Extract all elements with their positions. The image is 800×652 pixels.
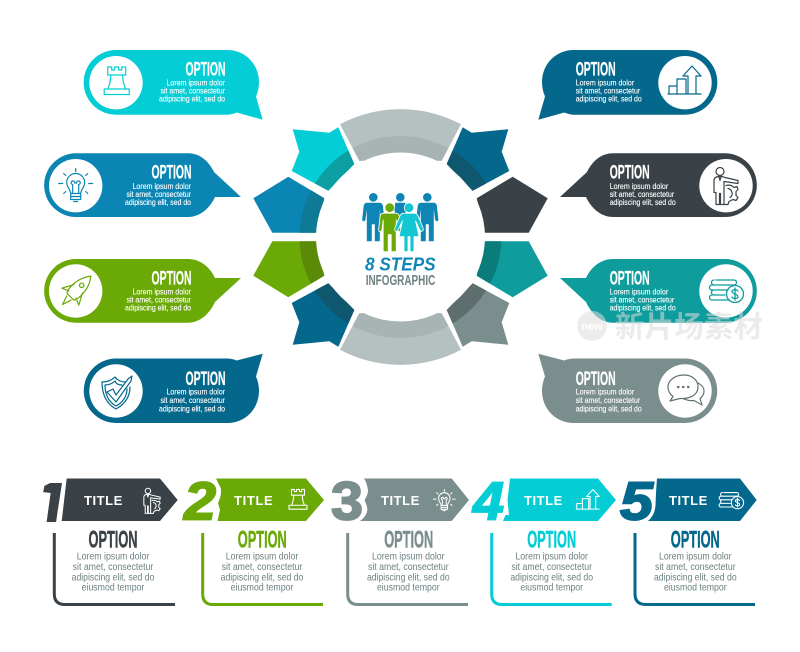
callout: bottom right grey: sit amet, consectetur bbox=[576, 395, 640, 405]
watermark: new bbox=[581, 321, 603, 333]
icon: rook bbox=[104, 67, 129, 94]
step 4: eiusmod tempor bbox=[520, 582, 583, 594]
callout: top left light teal: Lorem ipsum dolor bbox=[166, 78, 225, 88]
callout: charcoal right bbox=[560, 153, 757, 217]
ring segment: teal arrow bbox=[477, 241, 548, 297]
callout: teal right: OPTION bbox=[610, 268, 650, 289]
icon: growth chart small bbox=[576, 490, 599, 509]
arrow banner 3 bbox=[360, 478, 469, 521]
step 2: OPTION bbox=[238, 527, 287, 554]
ring segment: grey arrow lower right bbox=[447, 283, 509, 347]
icon: businessman with gear bbox=[714, 168, 738, 204]
step 5: sit amet, consectetur bbox=[655, 561, 736, 573]
icon: businessman small bbox=[144, 488, 160, 513]
callout: blue left: sit amet, consectetur bbox=[126, 189, 191, 199]
callout: bottom left dark blue: Lorem ipsum dolor bbox=[166, 387, 225, 397]
callout: charcoal right: sit amet, consectetur bbox=[610, 189, 674, 199]
number 2: 2 bbox=[183, 472, 216, 532]
callout: charcoal right: Lorem ipsum dolor bbox=[610, 181, 668, 191]
callout: top right dark blue: sit amet, consectetur bbox=[576, 86, 640, 96]
callout: bottom right grey: adipiscing elit, sed do bbox=[576, 404, 642, 414]
step 2: eiusmod tempor bbox=[231, 582, 294, 594]
icon: light bulb small bbox=[433, 489, 455, 511]
step 3: sit amet, consectetur bbox=[368, 561, 449, 573]
step 5: TITLE bbox=[669, 493, 708, 508]
step 3: adipiscing elit, sed do bbox=[367, 571, 450, 583]
icon: rook small bbox=[289, 489, 307, 509]
step 4 bbox=[472, 472, 616, 604]
icon: group of people bbox=[362, 193, 438, 252]
icon: growth chart bbox=[668, 66, 701, 94]
step 1 bbox=[33, 474, 178, 604]
heading: infographic: INFOGRAPHIC bbox=[366, 272, 435, 289]
ring segment: dark blue arrow lower left bbox=[292, 283, 354, 347]
callout: charcoal right: adipiscing elit, sed do bbox=[610, 197, 676, 207]
watermark: 新片场素材 bbox=[615, 311, 763, 344]
step 3 bbox=[331, 472, 469, 604]
step 3: Lorem ipsum dolor bbox=[372, 550, 445, 562]
number 3: 3 bbox=[331, 472, 363, 532]
callout: teal right: adipiscing elit, sed do bbox=[610, 302, 676, 312]
callout: blue left: Lorem ipsum dolor bbox=[132, 181, 191, 191]
icon: rocket bbox=[54, 268, 99, 313]
step 4: adipiscing elit, sed do bbox=[510, 571, 593, 583]
step 1: sit amet, consectetur bbox=[73, 561, 154, 573]
callout: top left light teal: sit amet, consectetur bbox=[160, 86, 225, 96]
callout: blue left bbox=[44, 153, 241, 217]
step 1: Lorem ipsum dolor bbox=[77, 550, 150, 562]
step 3: OPTION bbox=[384, 527, 433, 554]
arrow banner 2 bbox=[216, 478, 324, 521]
number 4: 4 bbox=[472, 472, 504, 532]
step 5: adipiscing elit, sed do bbox=[654, 571, 737, 583]
callout: top right dark blue: OPTION bbox=[576, 60, 616, 81]
icon: speech bubbles bbox=[668, 375, 704, 405]
icon: light bulb bbox=[59, 168, 93, 202]
callout: bottom left dark blue: sit amet, consectetur bbox=[160, 395, 225, 405]
step 1: eiusmod tempor bbox=[82, 582, 145, 594]
arrow banner 5 bbox=[648, 478, 757, 521]
icon: shield with check bbox=[102, 376, 132, 409]
callout: bottom right grey: OPTION bbox=[576, 369, 616, 390]
step 1: TITLE bbox=[84, 493, 123, 508]
step 2: adipiscing elit, sed do bbox=[221, 571, 303, 583]
callout: green left: adipiscing elit, sed do bbox=[125, 302, 191, 312]
number 1: 1 bbox=[33, 474, 67, 534]
step 5: OPTION bbox=[671, 527, 720, 554]
callout: teal right: sit amet, consectetur bbox=[610, 294, 674, 304]
step 1: OPTION bbox=[88, 527, 138, 554]
ring segment: charcoal arrow bbox=[477, 177, 548, 233]
step 5: eiusmod tempor bbox=[664, 582, 727, 594]
callout: green left: sit amet, consectetur bbox=[126, 294, 191, 304]
callout: bottom right grey bbox=[538, 354, 717, 423]
callout: top right dark blue: Lorem ipsum dolor bbox=[576, 78, 634, 88]
step 4: Lorem ipsum dolor bbox=[515, 550, 588, 562]
step 5: Lorem ipsum dolor bbox=[659, 550, 732, 562]
callout: top left light teal: adipiscing elit, sed do bbox=[159, 94, 225, 104]
step 2: sit amet, consectetur bbox=[222, 561, 303, 573]
callout: top right dark blue bbox=[538, 50, 717, 120]
heading: 8 steps: 8 STEPS bbox=[365, 255, 436, 275]
step 4: sit amet, consectetur bbox=[511, 561, 592, 573]
step 4: TITLE bbox=[524, 493, 563, 508]
step 3: TITLE bbox=[381, 493, 420, 508]
callout: teal right: Lorem ipsum dolor bbox=[610, 286, 668, 296]
step 2: TITLE bbox=[234, 493, 273, 508]
callout: bottom right grey: Lorem ipsum dolor bbox=[576, 387, 634, 397]
callout: green left: OPTION bbox=[152, 268, 192, 289]
icon: coins bbox=[710, 280, 744, 302]
callout: top right dark blue: adipiscing elit, sed do bbox=[576, 94, 642, 104]
callout: bottom left dark blue bbox=[84, 354, 263, 423]
step 2: Lorem ipsum dolor bbox=[226, 550, 299, 562]
centre white disc bbox=[316, 152, 485, 322]
callout: blue left: adipiscing elit, sed do bbox=[125, 197, 191, 207]
ring segment: blue arrow bbox=[253, 177, 324, 233]
panel: central ring diagram bbox=[253, 109, 548, 365]
callout: bottom left dark blue: OPTION bbox=[186, 369, 226, 390]
ring segment: light teal arrow bbox=[292, 127, 354, 191]
arrow banner 1 bbox=[62, 478, 178, 521]
step 2 bbox=[183, 472, 324, 604]
callout: teal right bbox=[560, 259, 757, 323]
arrow banner 4 bbox=[503, 478, 616, 521]
ring segment: green arrow bbox=[253, 241, 324, 297]
callout: green left bbox=[44, 259, 241, 323]
callout: blue left: OPTION bbox=[152, 163, 192, 184]
ring segment: bottom grey arc bbox=[340, 313, 461, 365]
step 4: OPTION bbox=[527, 527, 576, 554]
number 5: 5 bbox=[620, 472, 654, 532]
callout: top left light teal bbox=[84, 50, 263, 120]
ring segment: top grey arc bbox=[340, 109, 461, 161]
step 3: eiusmod tempor bbox=[377, 582, 440, 594]
step 5 bbox=[620, 472, 757, 604]
callout: top left light teal: OPTION bbox=[186, 60, 226, 81]
callout: green left: Lorem ipsum dolor bbox=[132, 286, 191, 296]
step 1: adipiscing elit, sed do bbox=[72, 571, 154, 583]
callout: charcoal right: OPTION bbox=[610, 163, 650, 184]
callout: bottom left dark blue: adipiscing elit, sed do bbox=[159, 404, 225, 414]
icon: coins small bbox=[719, 493, 744, 509]
ring segment: dark blue arrow upper right bbox=[447, 127, 509, 191]
